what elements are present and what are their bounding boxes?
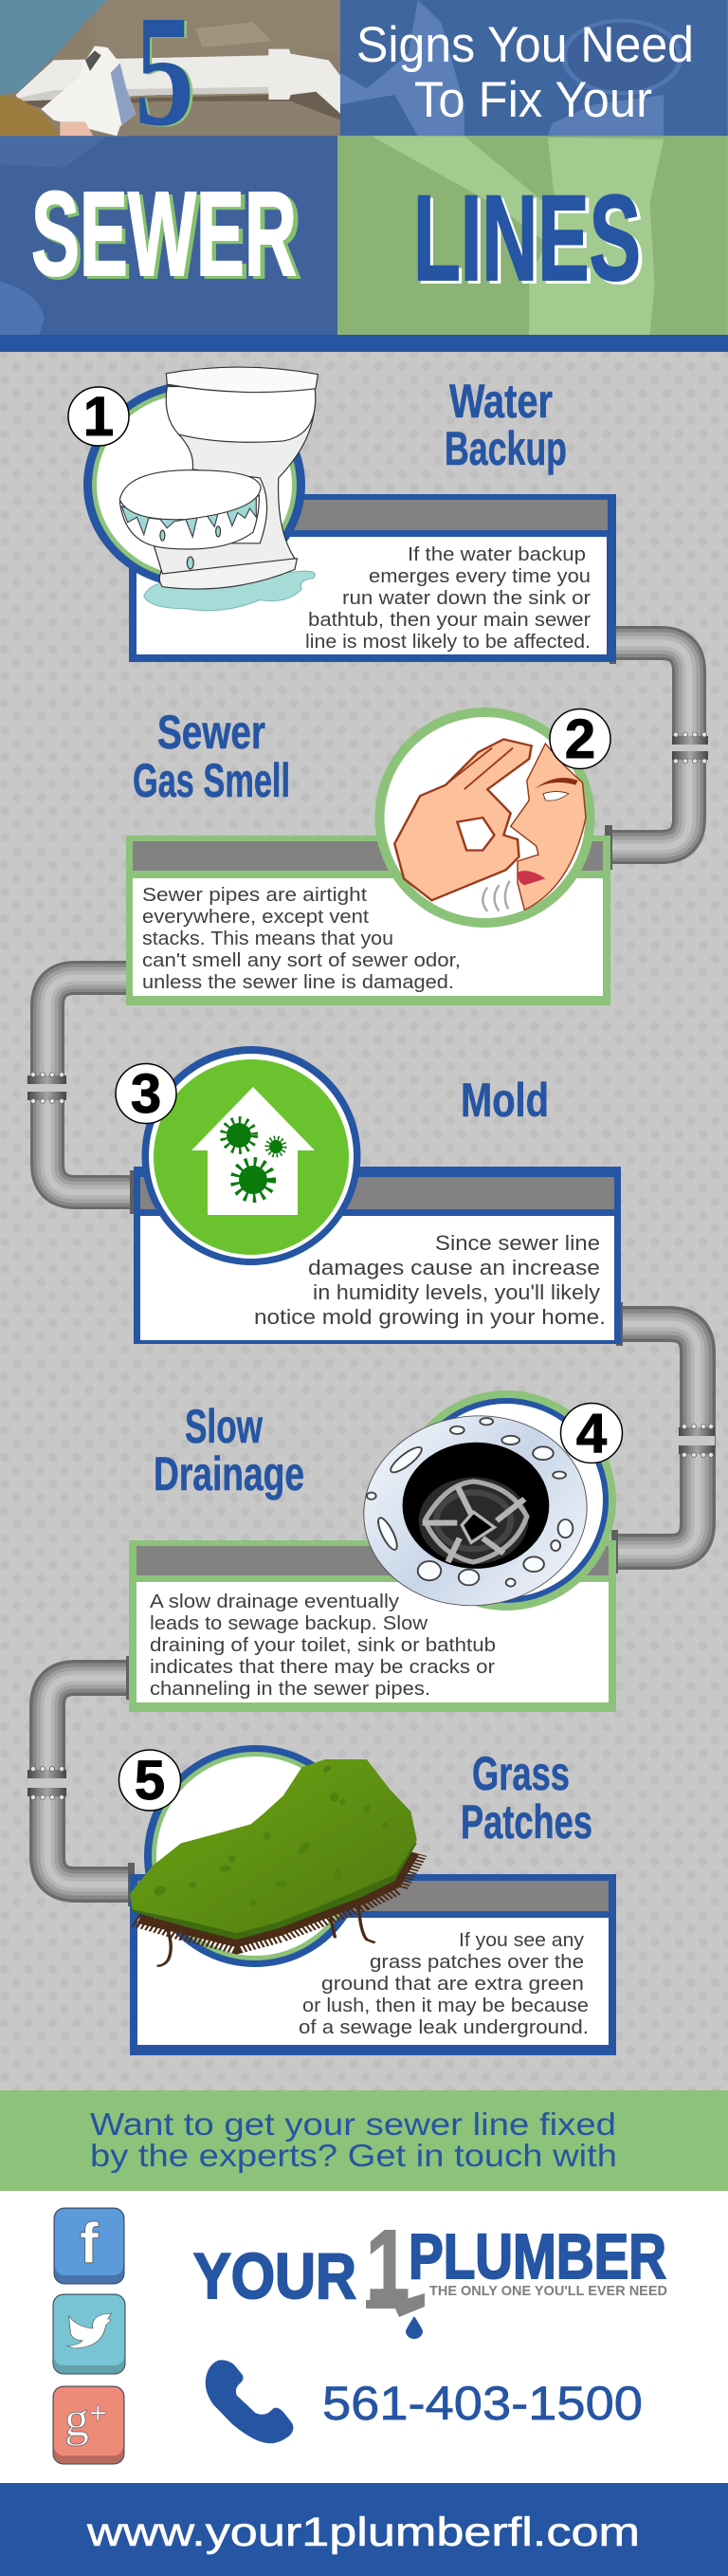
icon: facebook: f [80,2212,100,2275]
number badge 2: 2 [565,708,595,770]
icon: google plus: g [64,2393,89,2447]
body text: run water down the sink or [342,588,591,609]
icon: overflowing toilet [119,367,318,611]
logo: PLUMBER [409,2221,666,2292]
body text: leads to sewage backup. Slow [150,1613,428,1634]
body text: channeling in the sewer pipes. [150,1679,430,1700]
header panel: green bottom right [337,136,728,335]
body text: indicates that there may be cracks or [150,1657,495,1678]
body text: notice mold growing in your home. [254,1305,606,1329]
panel: step 5 grass patches [119,1745,616,2055]
title [133,706,290,807]
header photo: pipe and gloved hand [0,0,340,136]
pipe: step 1 to 2 [605,622,708,870]
number badge 3: 3 [131,1063,161,1125]
text box frame [126,836,610,1005]
header panel: blue bottom left [0,136,337,335]
call to action band [0,2090,728,2191]
footer website band [0,2483,728,2576]
body text: or lush, then it may be because [302,1996,589,2016]
dotted grey background [0,352,728,2090]
phone number: 561-403-1500 [322,2377,643,2430]
body text: stacks. This means that you [142,929,393,949]
logo [193,2210,667,2339]
number badge 3 [116,1063,176,1125]
body text: bathtub, then your main sewer [308,610,591,631]
icon: twitter [53,2294,125,2374]
icon: hand pinching nose [375,708,595,928]
title: Slow [185,1400,263,1453]
footer website band: www.your1plumberfl.com [86,2510,640,2555]
heading: SEWER [31,167,301,304]
icon: facebook [54,2208,124,2284]
call to action band: by the experts? Get in touch with [90,2138,617,2173]
panel: step 4 slow drainage [129,1390,622,1712]
title [461,1747,592,1849]
number badge 2 [550,708,610,770]
blue band [0,335,728,352]
panel: step 3 mold [116,1046,621,1344]
heading: Signs You Need To Fix Your: To Fix Your [414,72,652,128]
title: Water [449,375,553,428]
body text: ground that are extra green [321,1974,584,1995]
number badge 4: 4 [576,1403,607,1464]
icon: google plus [53,2386,124,2464]
body text [299,1930,589,2038]
number badge 1: 1 [83,386,114,448]
heading: Signs You Need To Fix Your [356,17,694,128]
title: Gas Smell [133,754,290,807]
number badge 5: 5 [135,1750,165,1812]
body text [254,1231,606,1329]
body text: Since sewer line [435,1231,600,1255]
icon: house with mold [142,1046,360,1265]
title: Grass [472,1747,570,1800]
title: Patches [461,1795,592,1849]
body text: everywhere, except vent [142,907,369,928]
text box frame [129,494,616,662]
icon: drain [348,1390,616,1622]
body text [142,885,461,993]
pipes [27,622,715,1906]
header panel: blue top right [340,0,728,136]
heading: Signs You Need To Fix Your: Signs You Need [356,17,694,73]
body text: can't smell any sort of sewer odor, [142,950,461,971]
body text [150,1592,496,1700]
body text: Sewer pipes are airtight [142,885,367,906]
number badge 1 [68,386,129,448]
body text: grass patches over the [370,1952,584,1973]
number badge 4 [561,1403,622,1464]
number badge 5 [119,1750,180,1812]
text box frame [129,1540,616,1712]
body text: in humidity levels, you'll likely [313,1280,600,1304]
icon: google plus: + [89,2396,107,2430]
logo: 1 [366,2210,410,2322]
body text: draining of your toilet, sink or bathtub [150,1635,496,1656]
body text: If you see any [459,1930,584,1951]
title: Sewer [157,706,265,759]
heading: SEWER: SEWER [31,167,297,301]
body text [305,544,591,653]
body text: unless the sewer line is damaged. [142,972,454,993]
body text: emerges every time you [369,566,591,587]
title: Backup [445,422,567,475]
panel: step 1 water backup [68,367,616,662]
logo: YOUR [193,2240,356,2312]
title: Drainage [154,1447,304,1500]
body text: damages cause an increase [308,1256,600,1279]
body text: A slow drainage eventually [150,1592,399,1612]
call to action band: Want to get your sewer line fixed [90,2107,616,2142]
title [154,1400,304,1500]
icon: phone [206,2360,293,2443]
heading: SEWER: SEWER [34,170,301,304]
text box frame [130,1874,616,2055]
header [0,0,728,352]
body text: of a sewage leak underground. [299,2017,589,2038]
body text: line is most likely to be affected. [305,632,591,653]
pipe: step 3 to 4 [611,1302,715,1573]
logo: THE ONLY ONE YOU'LL EVER NEED [429,2283,667,2299]
body text: If the water backup [408,544,586,565]
pipe: step 4 to 5 [27,1656,135,1906]
panel: step 2 sewer gas smell [126,706,610,1005]
text box frame [134,1167,621,1344]
title [445,375,567,475]
icon: grass patch [130,1745,417,1967]
title: Mold [461,1074,549,1127]
pipe: step 2 to 3 [27,956,136,1214]
icon: circle behind toilet [83,381,305,588]
contact panel [0,2191,728,2483]
